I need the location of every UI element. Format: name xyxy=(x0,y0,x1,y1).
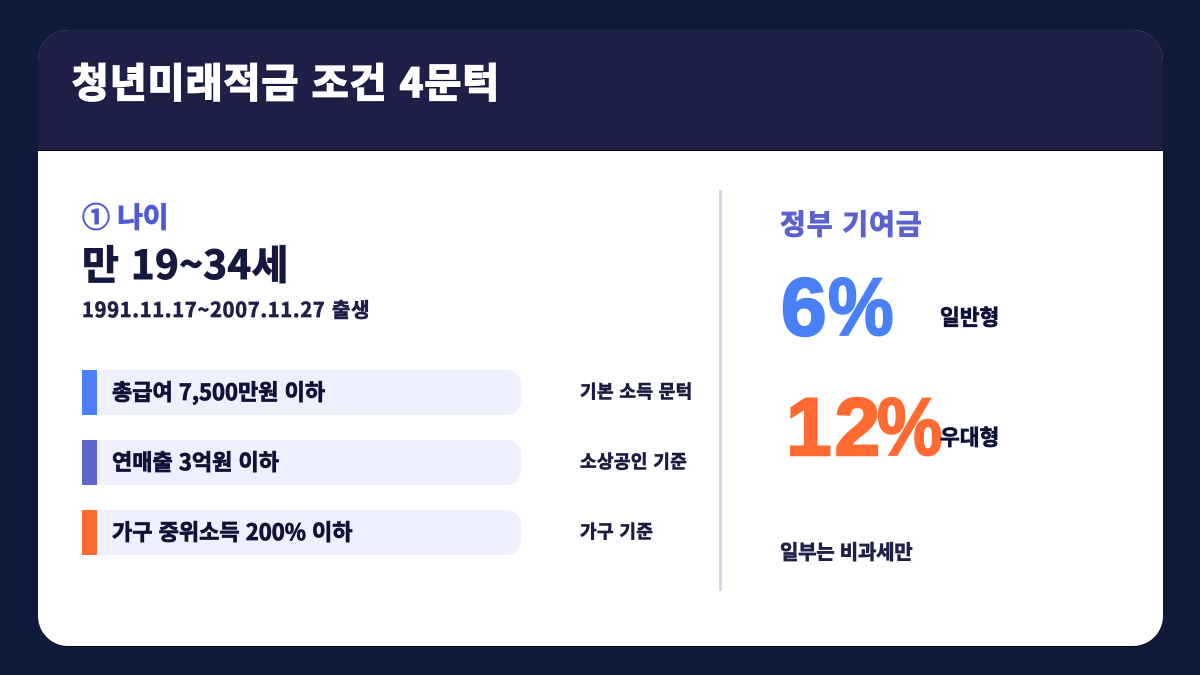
tax-free note: 일부는 비과세만 xyxy=(780,536,912,565)
accent bar indigo xyxy=(82,440,97,485)
preferential type label: 우대형 xyxy=(940,421,999,452)
row note: 기본 소득 문턱 xyxy=(580,378,693,404)
header band xyxy=(38,30,1163,151)
6% value xyxy=(781,262,893,353)
row text: 총급여 7,500만원 이하 xyxy=(112,375,325,407)
row background xyxy=(82,440,521,485)
contribution heading: 정부 기여금 xyxy=(780,203,923,243)
12% value xyxy=(786,382,943,473)
accent bar orange xyxy=(82,510,97,555)
age heading: ① 나이 xyxy=(82,196,168,236)
stat: 12% preferential xyxy=(786,382,999,473)
title: 청년미래적금 조건 4문턱 xyxy=(72,51,500,109)
6% value: 6 xyxy=(781,262,827,353)
stat: 6% general xyxy=(781,262,999,353)
panel: income conditions xyxy=(82,370,693,555)
row: gross salary xyxy=(82,370,693,415)
row background xyxy=(82,370,521,415)
6% value: % xyxy=(828,262,893,353)
panel: government contribution xyxy=(780,203,999,565)
12% value: % xyxy=(877,382,943,473)
age range: 만 19~34세 xyxy=(82,233,289,291)
general type label: 일반형 xyxy=(940,301,999,332)
row note: 가구 기준 xyxy=(580,518,653,544)
row: revenue xyxy=(82,440,687,485)
row: household income xyxy=(82,510,653,555)
row background xyxy=(82,510,521,555)
birth date range: 1991.11.17~2007.11.27 출생 xyxy=(82,294,370,323)
row note: 소상공인 기준 xyxy=(580,448,687,474)
row text: 연매출 3억원 이하 xyxy=(112,445,279,477)
12% value: 12 xyxy=(786,382,883,473)
panel: age condition xyxy=(82,196,370,323)
row text: 가구 중위소득 200% 이하 xyxy=(112,515,353,547)
divider xyxy=(719,190,722,591)
accent bar blue xyxy=(82,370,97,415)
